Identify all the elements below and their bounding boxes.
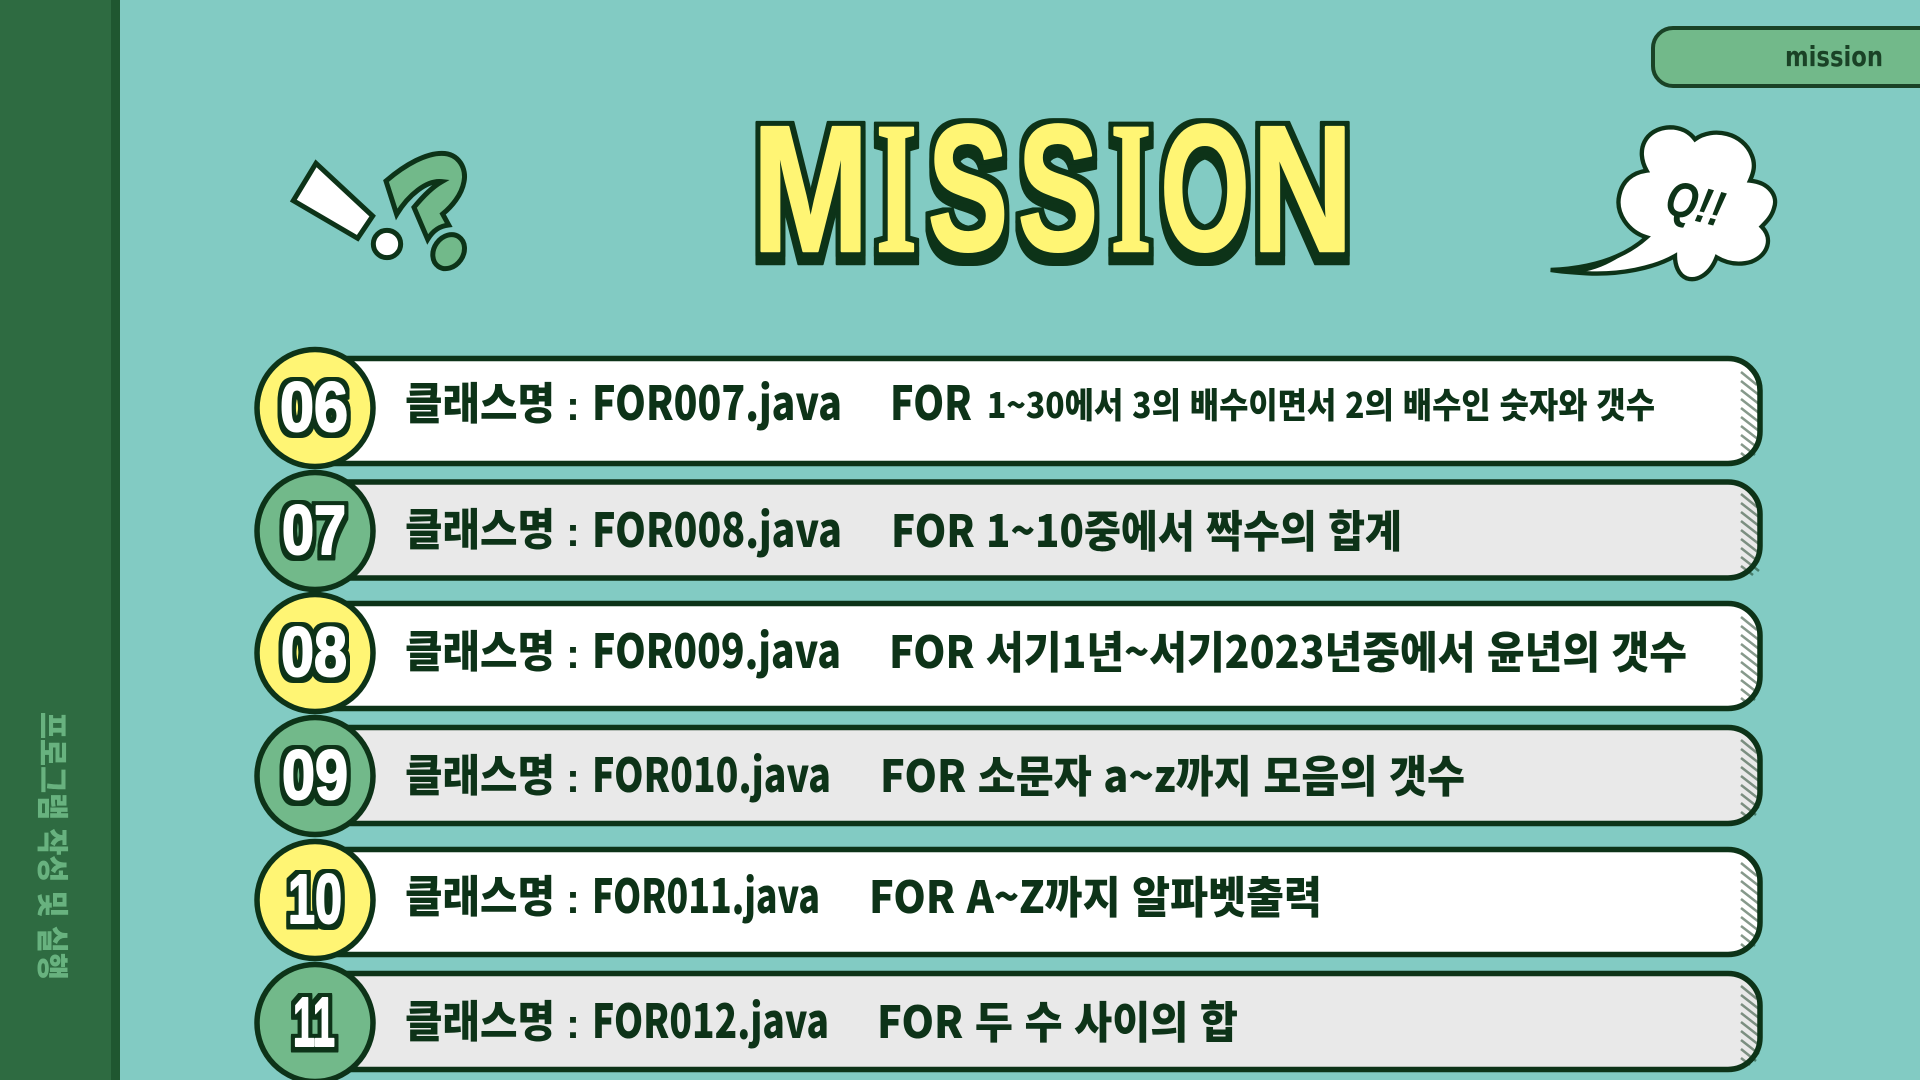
for label: FOR — [890, 365, 972, 434]
description: FOR 1~10중에서 짝수의 합계 — [891, 496, 1402, 560]
class name label: 클래스명 — [405, 368, 555, 432]
number badge — [257, 964, 373, 1080]
row 11 — [257, 964, 1760, 1080]
number: 11 — [293, 983, 335, 1061]
class name label: 클래스명 — [405, 494, 555, 558]
hatch — [1741, 494, 1759, 575]
row bar — [300, 974, 1760, 1070]
colon: : — [566, 508, 580, 555]
description: FOR A~Z까지 알파벳출력 — [869, 862, 1322, 926]
bubble text: Q!! — [1660, 169, 1730, 238]
title: M — [752, 89, 869, 290]
exclamation bar — [293, 163, 373, 238]
class name label: 클래스명 — [405, 740, 555, 804]
number: 10 — [288, 860, 342, 938]
question dot — [426, 228, 471, 275]
row bar — [300, 482, 1760, 578]
exclamation dot — [373, 230, 401, 258]
title: I — [876, 83, 917, 292]
title: N — [1252, 89, 1353, 290]
number badge — [257, 472, 373, 590]
title: S — [1018, 88, 1098, 289]
description: FOR 서기1년~서기2023년중에서 윤년의 갯수 — [889, 617, 1687, 681]
hatch — [1741, 986, 1759, 1065]
colon: : — [566, 754, 580, 801]
title: I — [1111, 83, 1151, 292]
class name label: 클래스명 — [405, 861, 555, 925]
description: 1~30에서 3의 배수이면서 2의 배수인 숫자와 갯수 — [987, 378, 1655, 429]
row 08 — [257, 594, 1760, 712]
number: 07 — [282, 491, 346, 569]
title: O — [1160, 88, 1250, 289]
colon: : — [566, 630, 580, 677]
number: 08 — [281, 613, 347, 691]
row bar — [300, 728, 1760, 824]
row 10 — [257, 842, 1760, 958]
number badge — [257, 718, 373, 834]
tab: mission — [1653, 28, 1920, 86]
class name label: 클래스명 — [405, 986, 555, 1050]
row 06 — [257, 350, 1760, 466]
row bar — [300, 604, 1760, 708]
number: 06 — [280, 368, 348, 446]
class name label: 클래스명 — [405, 616, 555, 680]
description: FOR 두 수 사이의 합 — [877, 987, 1238, 1051]
number badge — [257, 350, 373, 466]
sidebar label: 프로그램 작성 및 실행 — [31, 712, 77, 980]
row bar — [300, 850, 1760, 954]
number badge — [257, 842, 373, 958]
title: S — [928, 88, 1008, 289]
hatch — [1741, 863, 1759, 948]
row 07 — [257, 472, 1760, 590]
title — [752, 83, 1353, 292]
class name: FOR007.java — [592, 365, 842, 434]
hatch — [1741, 617, 1759, 702]
colon: : — [566, 1000, 580, 1047]
sidebar — [0, 0, 120, 1080]
question mark — [386, 153, 465, 239]
row 09 — [257, 718, 1760, 834]
icon: exclamation and question marks — [293, 153, 471, 275]
class name: FOR009.java — [592, 613, 841, 682]
description: FOR 소문자 a~z까지 모음의 갯수 — [880, 741, 1465, 805]
number: 09 — [282, 736, 348, 814]
colon: : — [566, 382, 580, 429]
hatch — [1741, 372, 1759, 457]
colon: : — [566, 875, 580, 922]
class name: FOR011.java — [592, 858, 820, 927]
icon: speech bubble — [1551, 127, 1775, 279]
class name: FOR010.java — [592, 737, 831, 806]
class name: FOR012.java — [592, 983, 829, 1052]
number badge — [257, 594, 373, 712]
hatch — [1741, 740, 1759, 819]
class name: FOR008.java — [592, 492, 842, 561]
row bar — [300, 358, 1760, 464]
tab label: mission — [1785, 40, 1883, 73]
